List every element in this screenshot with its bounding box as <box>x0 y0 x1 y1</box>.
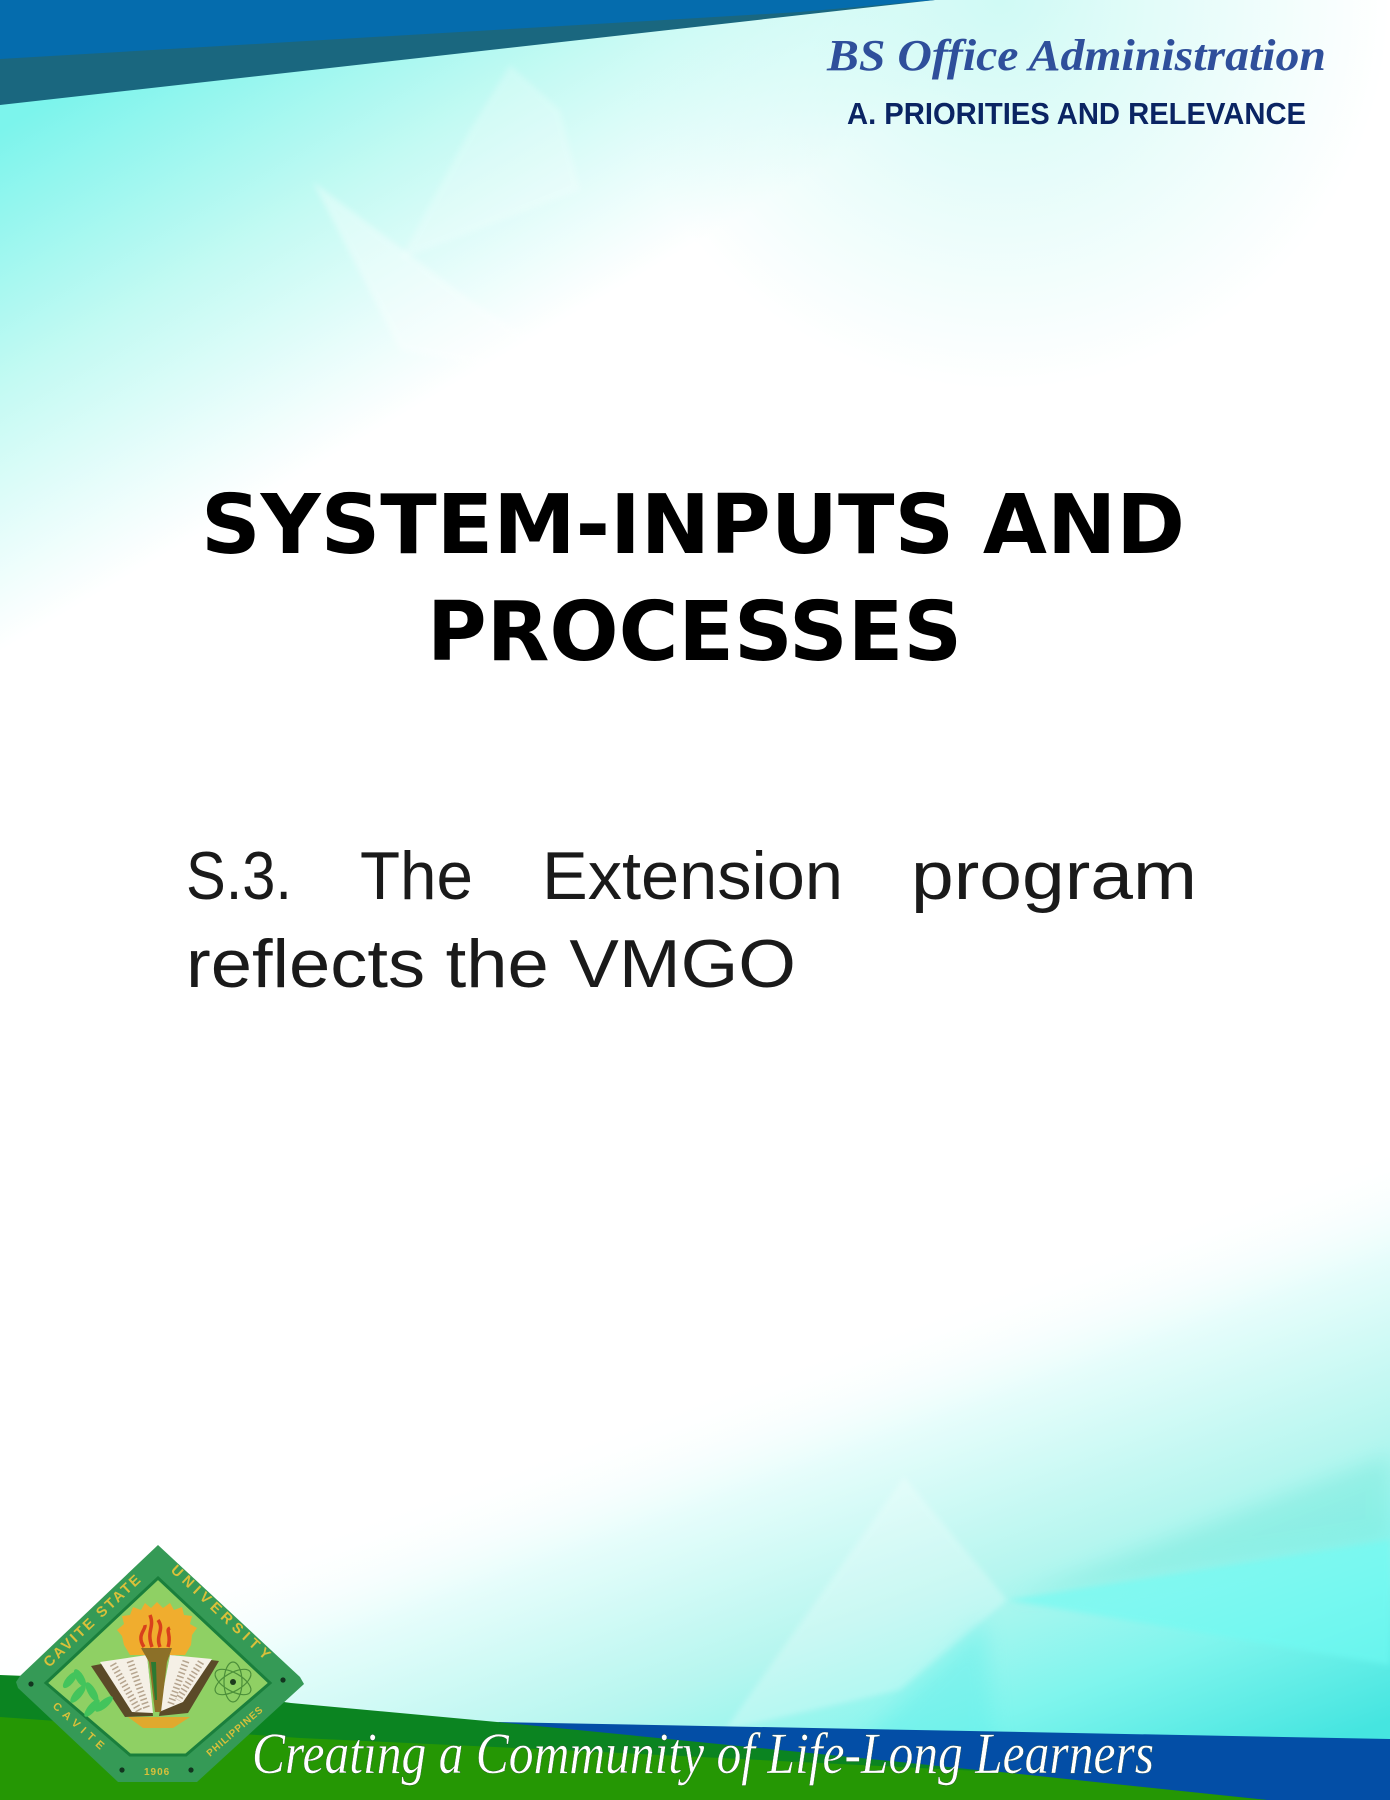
background gradient: bottom right <box>0 1100 1390 1800</box>
logo icon: open book <box>91 1655 219 1717</box>
logo ring text: 1906 <box>144 1767 170 1778</box>
logo book: text lines <box>113 1661 201 1711</box>
logo inner panel <box>46 1578 270 1755</box>
logo ring text: PHILIPPINES <box>206 1706 262 1756</box>
logo: Cavite State University seal <box>16 1545 304 1782</box>
logo ring text <box>44 1564 272 1778</box>
logo rivets <box>28 1677 286 1773</box>
body statement: S.3. <box>186 838 292 914</box>
footer slogan: Creating a Community of Life-Long Learners <box>252 1721 1154 1786</box>
logo icon: torch <box>141 1648 172 1712</box>
logo outer diamond <box>16 1545 304 1782</box>
body statement: program <box>911 838 1197 914</box>
logo icon: leaves <box>61 1667 115 1719</box>
title <box>201 478 1185 680</box>
logo icon: flame <box>141 1615 170 1647</box>
body statement <box>186 838 1197 1002</box>
header: program name: BS Office Administration <box>826 31 1326 80</box>
title: SYSTEM-INPUTS AND <box>201 478 1185 573</box>
body statement: Extension <box>542 838 843 914</box>
logo ring text: CAVITE STATE <box>44 1574 141 1666</box>
background gradient: top left <box>0 0 1390 800</box>
logo icon: sun <box>117 1602 197 1655</box>
body statement: The <box>360 838 473 914</box>
bottom banner <box>0 1675 1390 1800</box>
logo ring text: UNIVERSITY <box>172 1564 272 1658</box>
logo icon: atom <box>211 1662 255 1702</box>
logo icon: gear <box>128 1717 190 1728</box>
header: area name: A. PRIORITIES AND RELEVANCE <box>847 96 1306 131</box>
logo ring text: CAVITE <box>54 1703 105 1750</box>
title: PROCESSES <box>427 585 962 680</box>
top banner <box>0 0 935 105</box>
body statement: reflects the VMGO <box>186 926 796 1002</box>
